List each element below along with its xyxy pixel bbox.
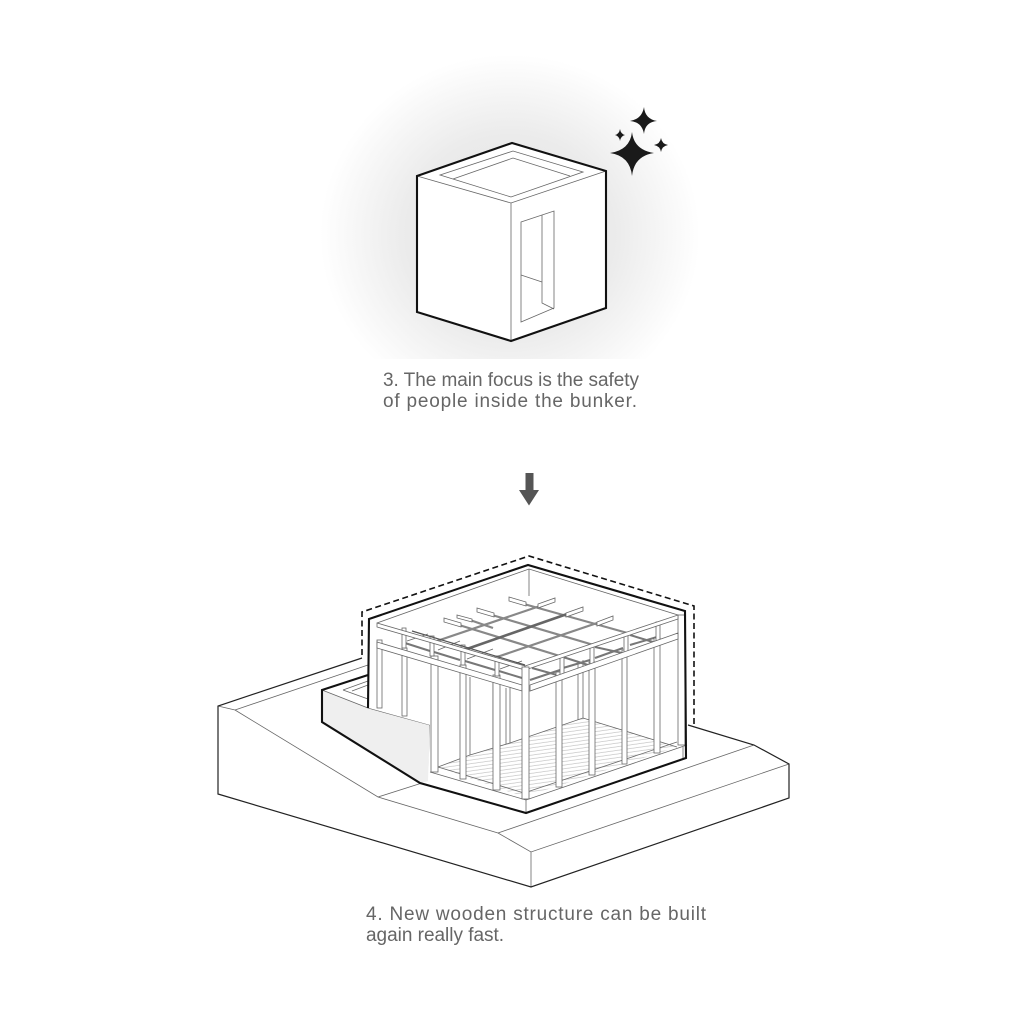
roof beam end: B3	[597, 616, 613, 626]
lower joists seen through frame	[405, 634, 657, 680]
roof beam end: A3	[509, 597, 526, 606]
bunker walls and floor	[369, 565, 687, 813]
caption 3: 3. The main focus is the safety	[383, 370, 640, 391]
arrow down	[519, 473, 539, 506]
background glow behind cube	[300, 40, 720, 359]
caption 3: of people inside the bunker.	[383, 391, 637, 412]
roof beam end: A extra	[457, 615, 472, 622]
annex block	[322, 675, 430, 783]
caption 3	[383, 370, 640, 412]
icon: sparkles	[610, 107, 668, 176]
roof beam end: B2	[566, 607, 583, 617]
roof beam grid	[434, 597, 631, 658]
dashed former roof outline	[362, 556, 694, 725]
bunker thick outline	[322, 565, 686, 813]
caption 4: again really fast.	[366, 925, 504, 946]
timber columns left face	[377, 640, 500, 790]
timber columns right face	[556, 615, 685, 787]
caption 4: 4. New wooden structure can be built	[366, 904, 707, 925]
roof beam end: B1	[538, 598, 555, 608]
corner column	[522, 667, 529, 799]
caption 4	[366, 904, 707, 946]
icon: bunker cube	[417, 143, 606, 341]
ground slab	[218, 655, 789, 887]
frame perimeter beams	[377, 615, 678, 691]
roof beam end: A1	[444, 618, 461, 627]
roof posts between beams	[402, 622, 660, 676]
roof beam end: A2	[477, 608, 494, 617]
